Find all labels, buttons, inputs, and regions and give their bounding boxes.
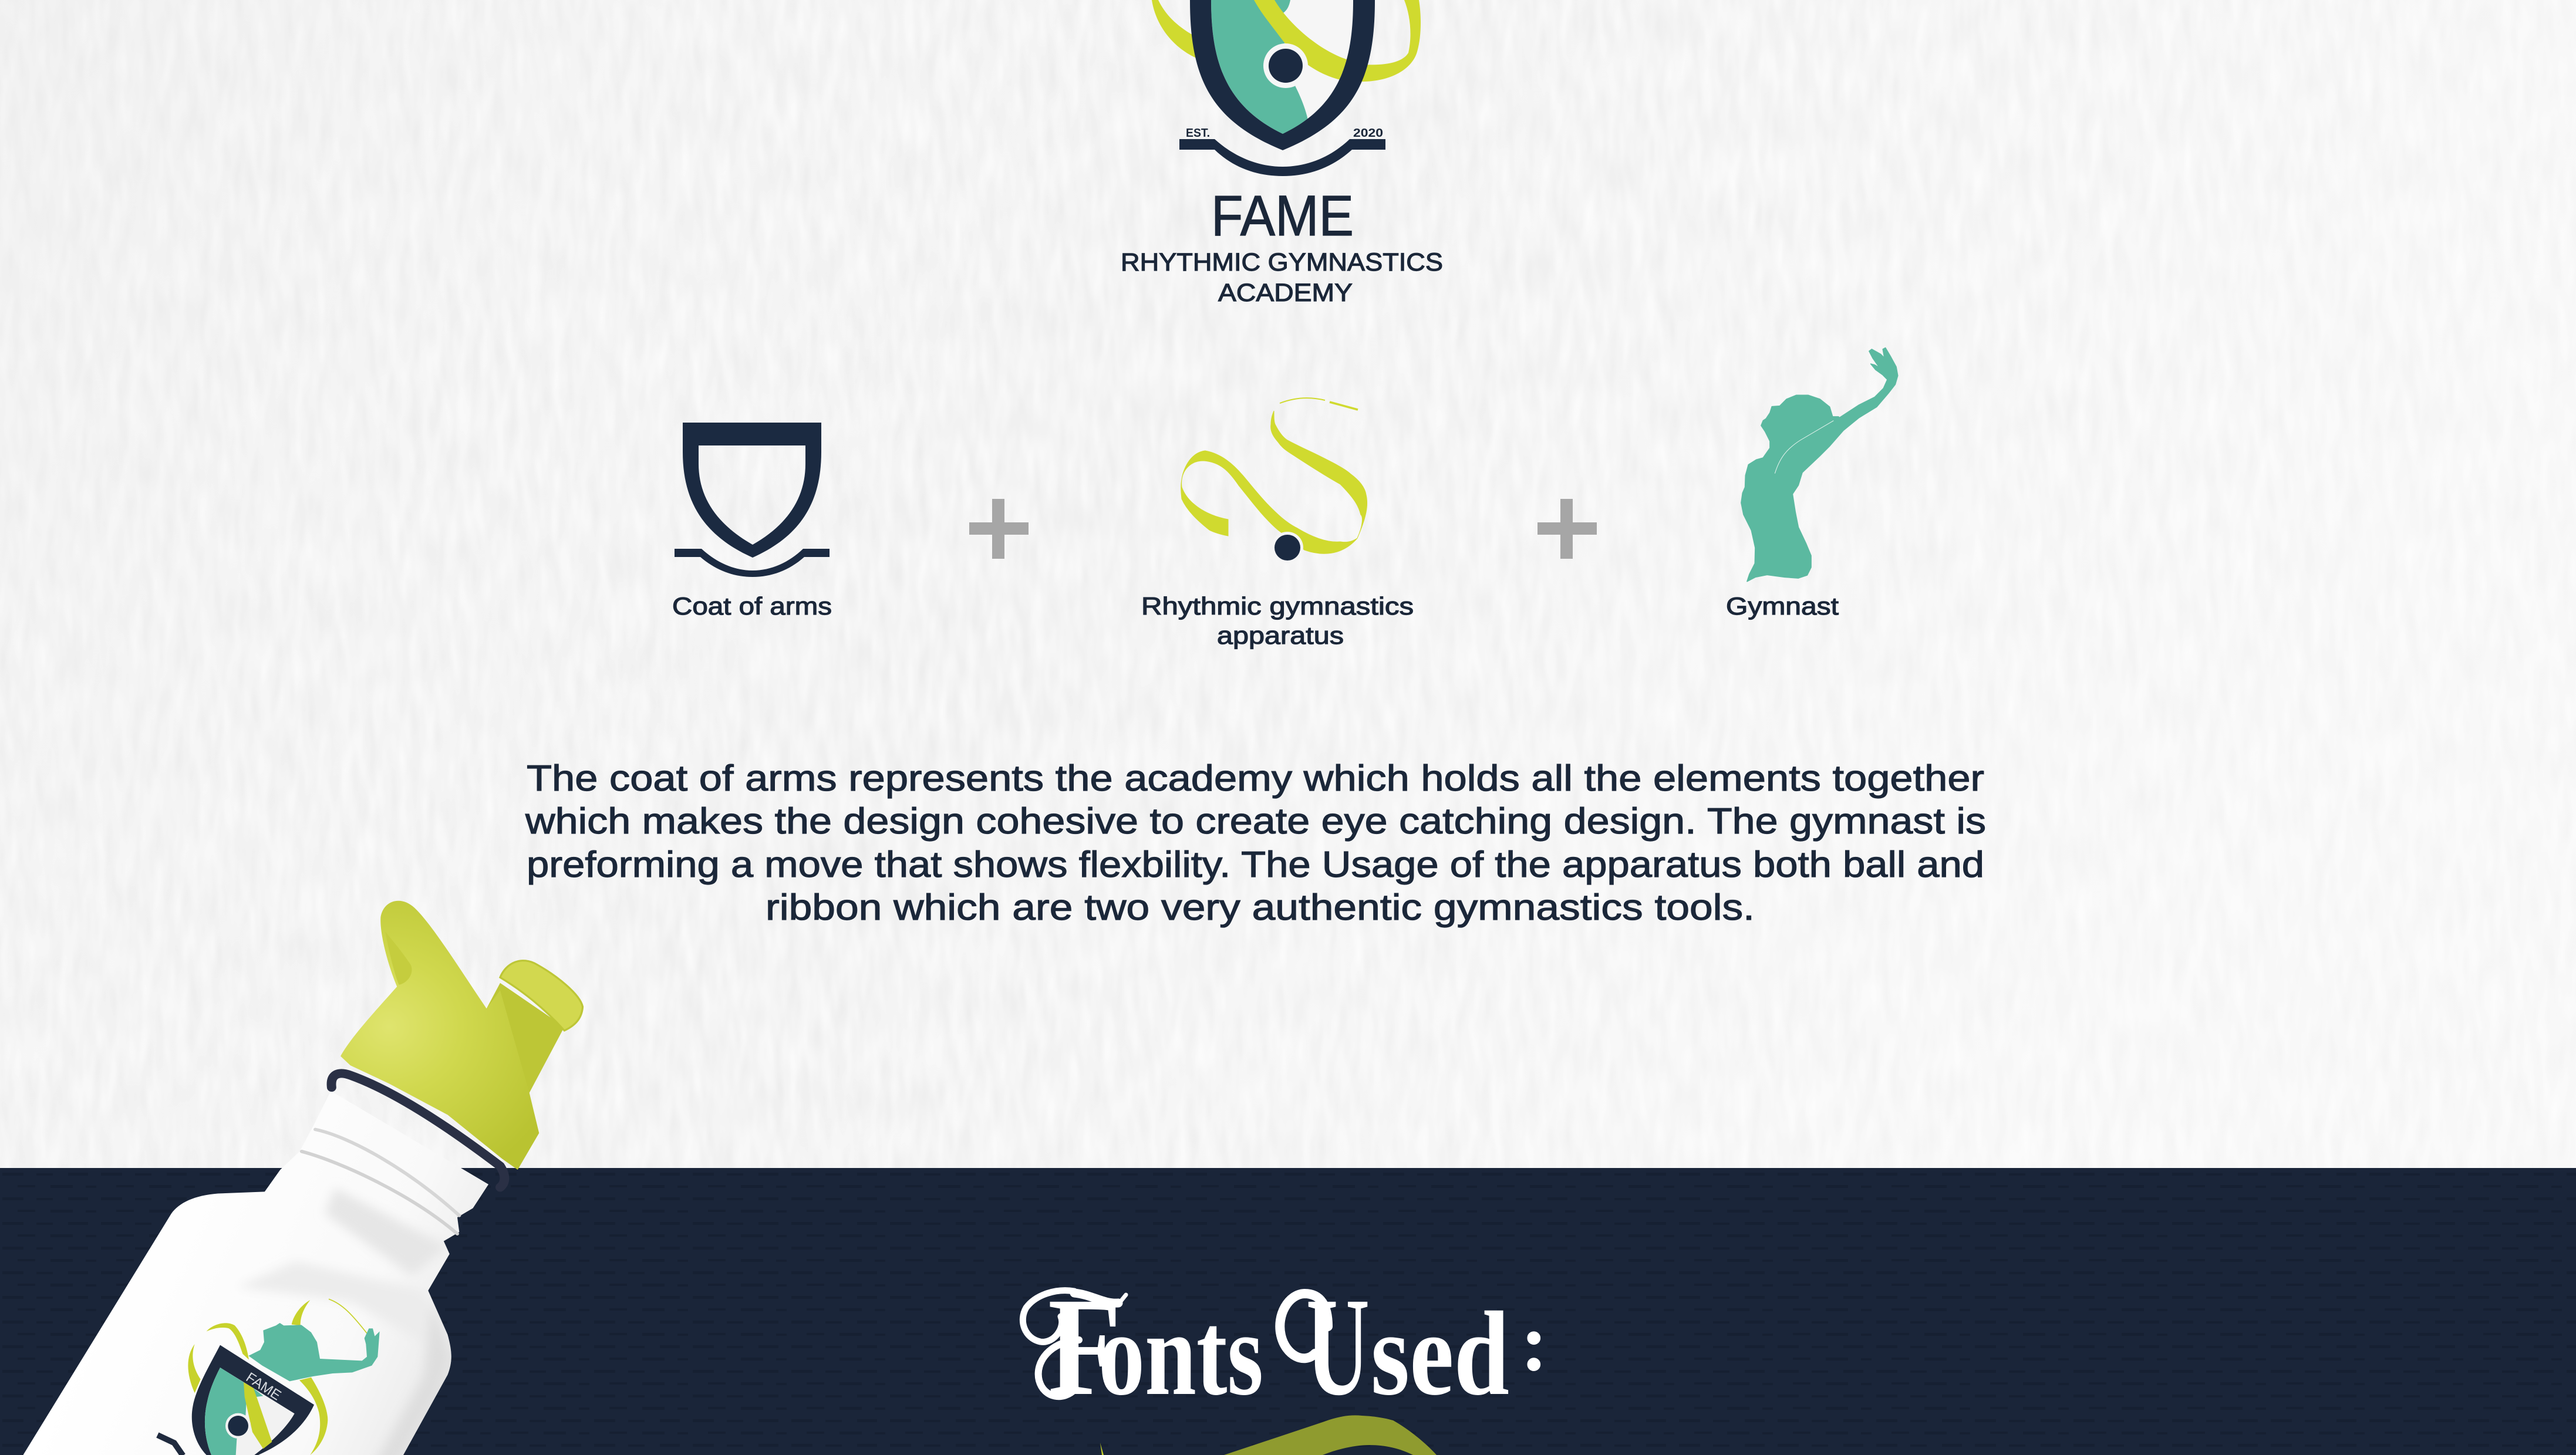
water bottle mockup [23, 901, 583, 1455]
plus sign [969, 499, 1029, 559]
est label: EST. [1186, 127, 1210, 140]
heading: fonts used [1023, 1268, 1548, 1424]
founding year: 2020 [1353, 127, 1383, 140]
logo subtitle [1121, 248, 1443, 307]
caption: apparatus: Rhythmic gymnastics [1141, 592, 1414, 620]
bottle logo [157, 1299, 380, 1455]
cap loop hole [385, 931, 412, 985]
heading swashes [1023, 1291, 1328, 1396]
logo subtitle: ACADEMY [1218, 279, 1353, 307]
logo subtitle: RHYTHMIC GYMNASTICS [1121, 248, 1443, 276]
description paragraph [525, 758, 1986, 928]
bottle logo base line [157, 1435, 183, 1455]
heading text: F [1048, 1268, 1121, 1424]
caption: gymnast: Gymnast [1726, 592, 1839, 620]
base line [1179, 139, 1385, 176]
bottle body [23, 1091, 488, 1455]
icon: ribbon and ball apparatus [1181, 398, 1367, 563]
cap [340, 901, 539, 1170]
caption: apparatus: apparatus [1217, 622, 1344, 649]
heading text: : [1520, 1297, 1548, 1388]
logo wordmark: FAME [1211, 184, 1354, 248]
heading text: sed [1371, 1287, 1509, 1420]
ball [1263, 43, 1308, 88]
shield interior [1211, 0, 1347, 134]
dark footer band [0, 1168, 2576, 1455]
shield outline [1190, 0, 1375, 150]
plus sign [1537, 499, 1597, 559]
description paragraph: ribbon which are two very authentic gymnastics tools. [766, 887, 1755, 928]
heading text: onts [1098, 1287, 1263, 1420]
icon: gymnast silhouette [1741, 348, 1898, 582]
icon: coat of arms shield [675, 423, 830, 577]
gymnast on bottle [248, 1323, 380, 1381]
ribbon behind shield [1152, 0, 1421, 82]
shield on bottle [192, 1345, 314, 1455]
heading text: U [1306, 1268, 1370, 1424]
description paragraph: which makes the design cohesive to create eye catching design. The gymnast is [525, 801, 1986, 842]
caption: coat of arms: Coat of arms [672, 592, 832, 620]
logo emblem [1152, 0, 1421, 176]
bottle logo name: FAME [243, 1369, 284, 1404]
spout [487, 961, 583, 1093]
cap seal ring [332, 1073, 504, 1187]
neck threads [302, 1129, 459, 1234]
caption: apparatus [1141, 592, 1414, 649]
description paragraph: preforming a move that shows flexbility. The Usage of the apparatus both ball and [527, 845, 1984, 885]
ribbon arcs [188, 1299, 367, 1455]
olive ribbon swoosh [1100, 1415, 1437, 1455]
description paragraph: The coat of arms represents the academy which holds all the elements together [527, 758, 1984, 799]
shoulder highlights [237, 1188, 451, 1455]
